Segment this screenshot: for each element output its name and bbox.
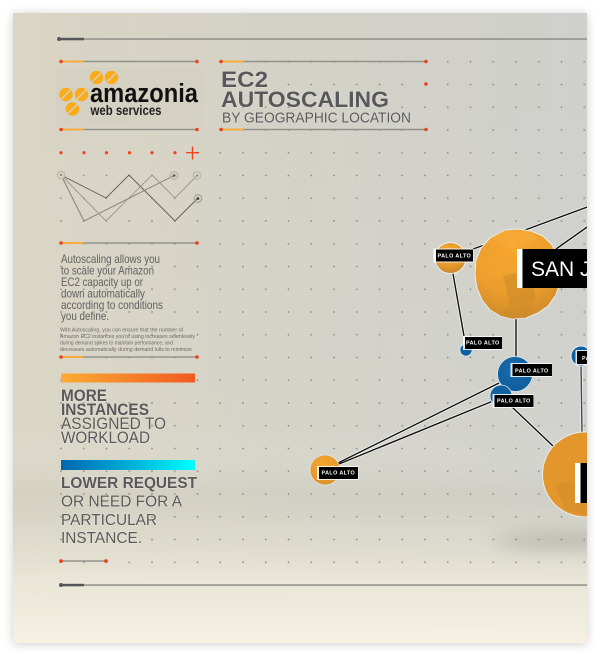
red dot row with plus icon xyxy=(59,146,199,160)
legend text: more instances: ASSIGNED TO xyxy=(61,414,166,433)
legend text: more instances xyxy=(61,386,166,447)
logo: amazonia web services xyxy=(56,68,204,127)
detail paragraph: decreases automatically during demand lulls to minimize xyxy=(60,347,192,353)
detail paragraph xyxy=(60,328,195,353)
node: small orange left xyxy=(310,455,340,485)
title: AUTOSCALING xyxy=(221,87,389,112)
detail paragraph: during demand spikes to maintain performance, and xyxy=(60,340,173,346)
legend bar: orange xyxy=(61,374,195,382)
node: big blue xyxy=(498,356,532,392)
legend text: lower request: INSTANCE. xyxy=(61,530,142,547)
intro paragraph: you define. xyxy=(61,309,109,323)
node: blue right xyxy=(570,346,587,366)
detail paragraph: With Autoscaling, you can ensure that the number of xyxy=(60,328,183,334)
label: palo alto 4: PALO ALTO xyxy=(497,398,531,404)
label: palo alto 2: PALO ALTO xyxy=(466,340,500,346)
label: palo alto 3 xyxy=(510,363,552,377)
node: San Jose sphere xyxy=(475,229,560,319)
node: large orange bottom xyxy=(542,432,587,518)
intro paragraph: to scale your Amazon xyxy=(61,264,154,278)
label: large bottom node xyxy=(575,463,587,503)
legend bar: blue xyxy=(61,460,195,470)
node: medium blue xyxy=(490,385,512,407)
legend text: lower request: PARTICULAR xyxy=(61,512,157,529)
intro paragraph xyxy=(61,252,163,323)
label: palo alto 6 xyxy=(317,466,358,480)
intro rule bottom xyxy=(59,355,199,359)
title accent dot xyxy=(424,82,428,86)
title rule bottom xyxy=(219,128,428,131)
legend text: lower request xyxy=(61,475,198,547)
network map xyxy=(310,206,600,517)
short rule xyxy=(59,559,108,563)
legend text: lower request: LOWER REQUEST xyxy=(61,475,198,492)
legend text: more instances: INSTANCES xyxy=(61,400,149,419)
label: palo alto 1 xyxy=(434,248,474,262)
label: palo alto 3: PALO ALTO xyxy=(515,368,549,374)
label: palo alto 1: PALO ALTO xyxy=(438,254,471,260)
label: palo alto 2 xyxy=(463,336,502,350)
intro paragraph: according to conditions xyxy=(61,298,163,312)
label: palo alto 6: PALO ALTO xyxy=(322,470,355,476)
title xyxy=(221,67,411,126)
logo rule top xyxy=(59,60,199,63)
connector lines xyxy=(338,206,590,464)
logo subtitle: web services xyxy=(90,103,162,118)
top rule xyxy=(57,37,587,41)
label: San Jose xyxy=(517,249,587,288)
node: small orange top xyxy=(435,242,466,274)
bottom rule xyxy=(59,583,587,587)
intro rule top xyxy=(59,241,199,245)
detail paragraph: Amazon EC2 instances you're using increases seamlessly xyxy=(60,334,195,340)
legend text: more instances: WORKLOAD xyxy=(61,428,150,447)
intro paragraph: Autoscaling allows you xyxy=(61,252,160,266)
legend text: more instances: MORE xyxy=(61,386,107,405)
title: BY GEOGRAPHIC LOCATION xyxy=(222,110,411,126)
logo wordmark: amazonia xyxy=(90,80,199,108)
intro paragraph: down automatically xyxy=(61,286,145,300)
label: palo alto 5 xyxy=(576,350,587,365)
title: EC2 xyxy=(221,67,268,92)
title rule top xyxy=(219,60,428,63)
node: small blue xyxy=(460,344,472,356)
legend text: lower request: OR NEED FOR A xyxy=(61,494,183,510)
label: palo alto 4 xyxy=(492,394,534,408)
intro paragraph: EC2 capacity up or xyxy=(61,275,143,289)
line chart xyxy=(57,171,202,221)
icon: orange beans xyxy=(59,71,118,116)
logo rule bottom xyxy=(59,128,199,131)
